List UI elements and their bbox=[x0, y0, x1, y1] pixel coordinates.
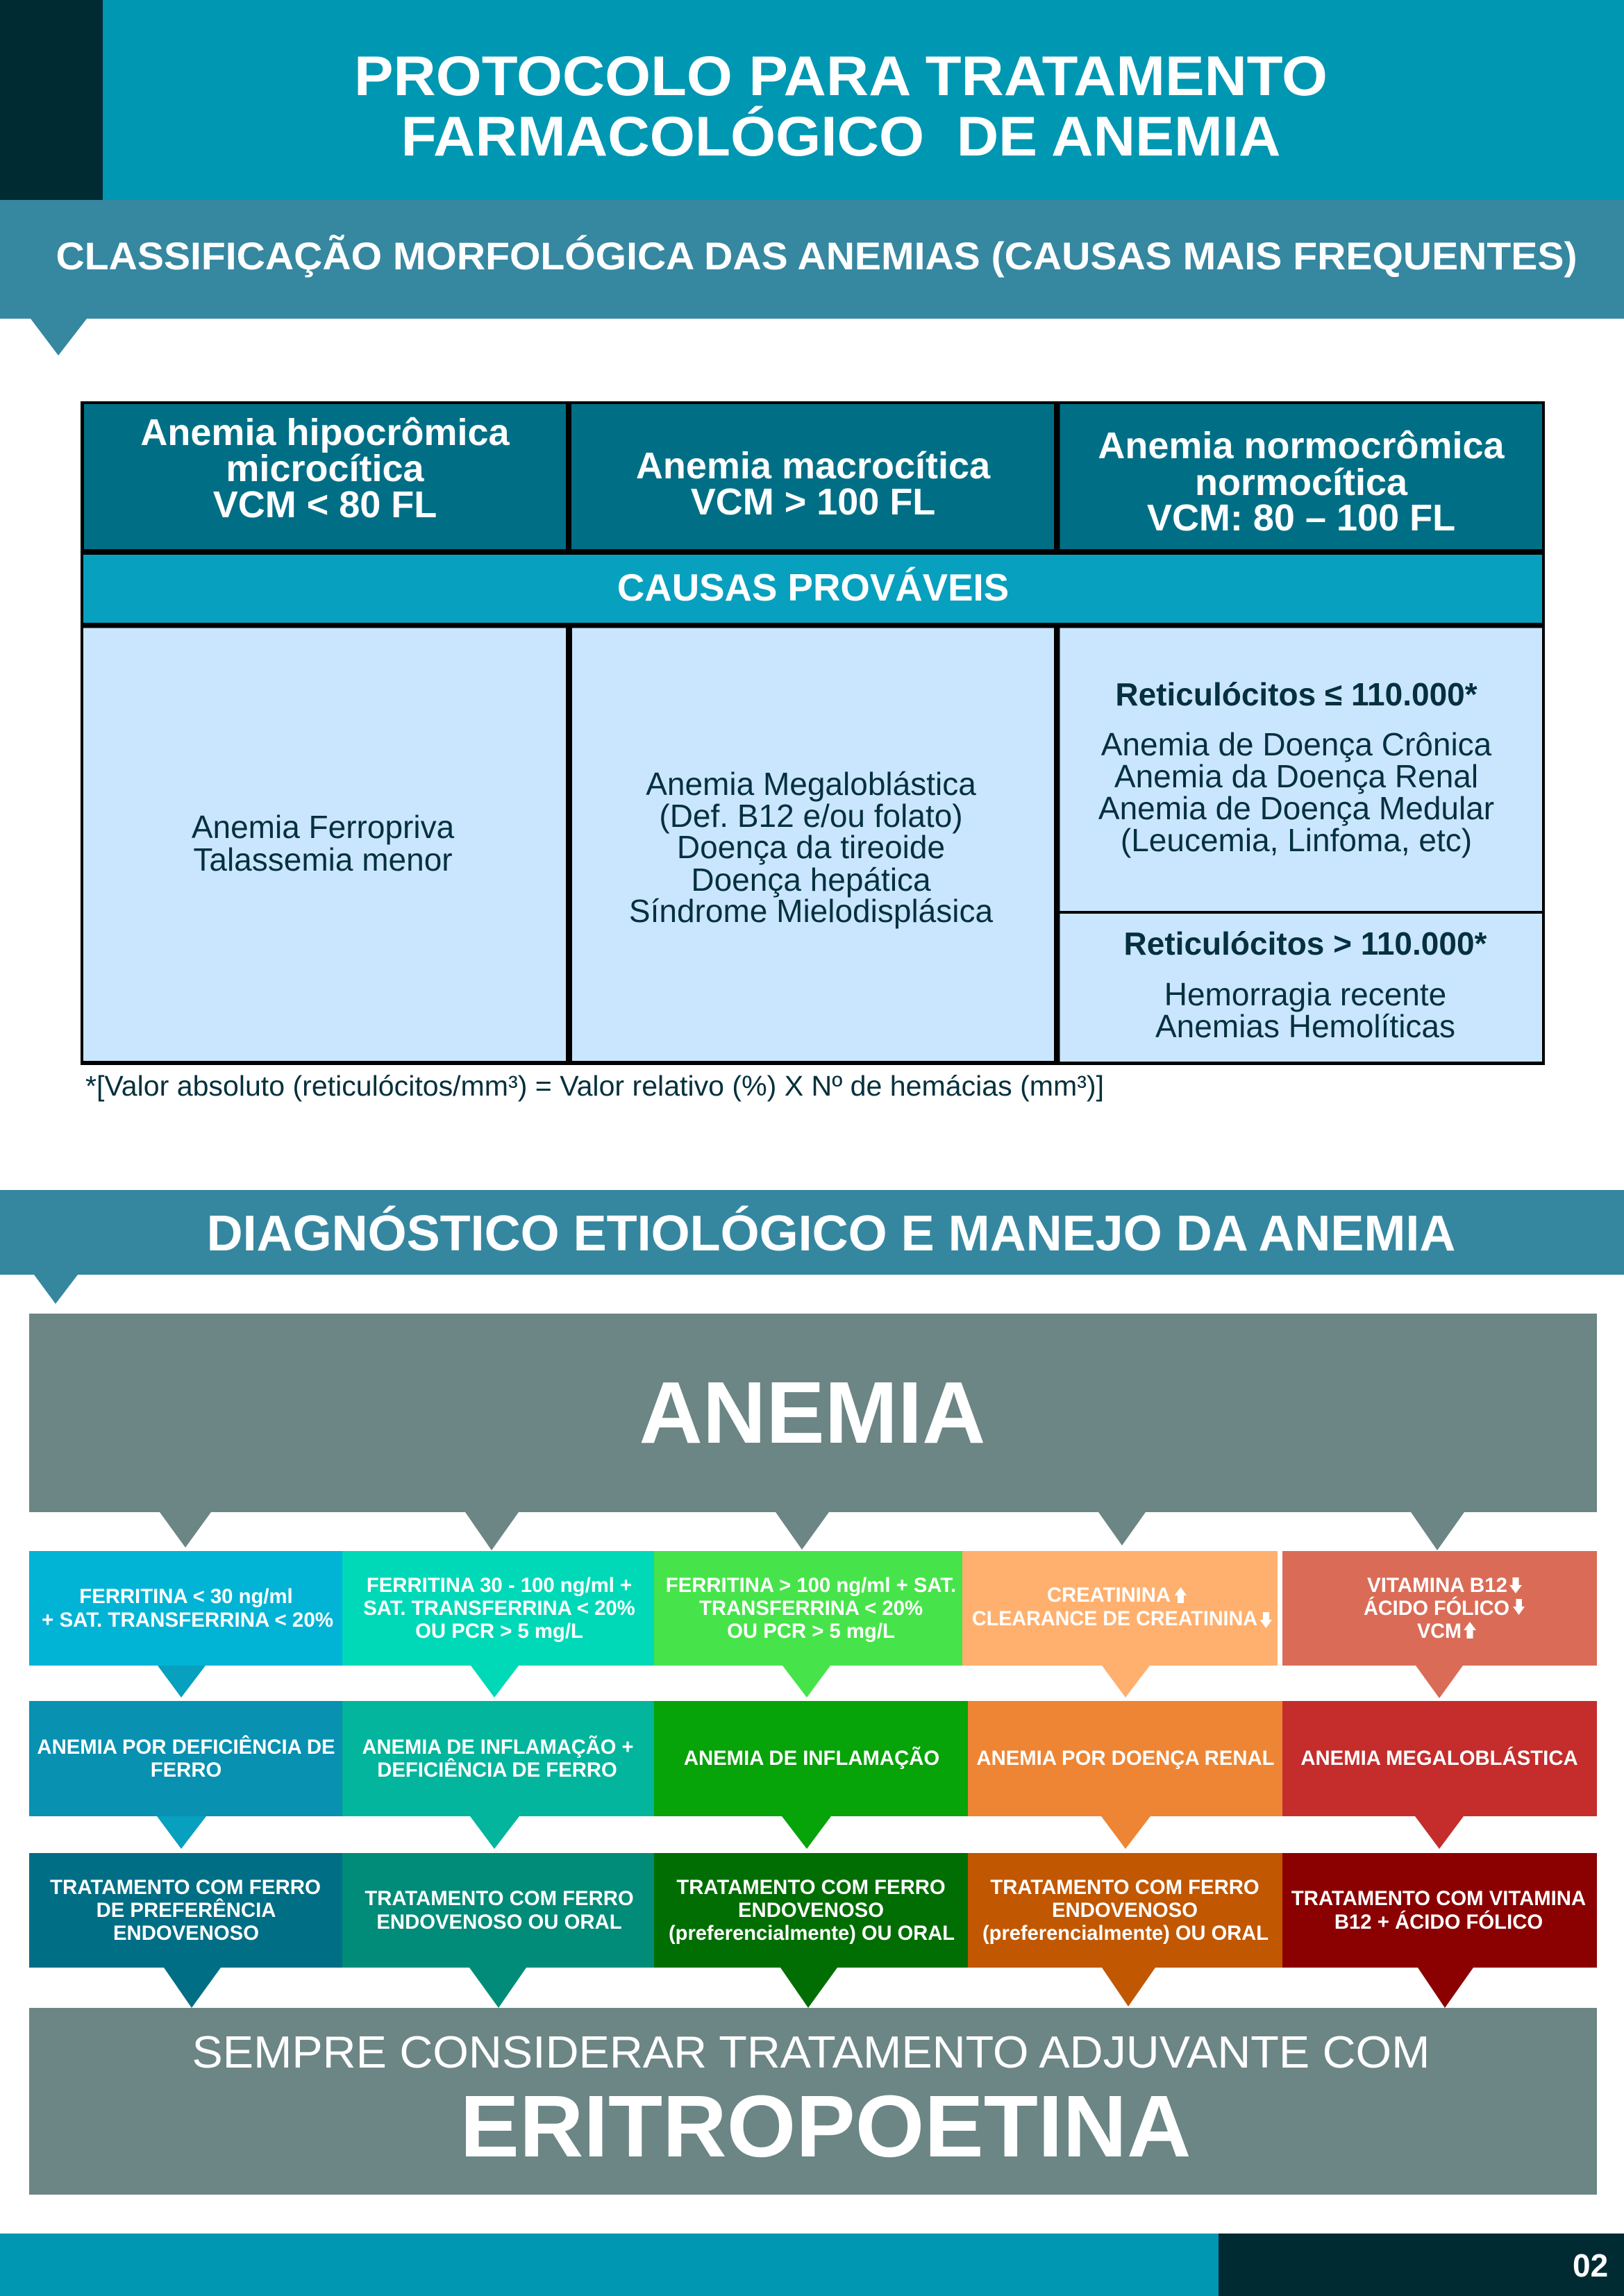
causes: reticulócitos baixos: (Leucemia, Linfoma, etc) bbox=[1121, 822, 1472, 858]
title banner: FARMACOLÓGICO DE ANEMIA bbox=[401, 105, 1280, 168]
title banner bbox=[0, 0, 1624, 200]
lab finding: ferritina intermediária bbox=[342, 1551, 654, 1698]
causes: reticulócitos baixos bbox=[1060, 628, 1542, 911]
lab finding: ferritina intermediária: FERRITINA 30 - 100 ng/ml + bbox=[367, 1574, 632, 1597]
lab finding: vitamina B12: VITAMINA B12 bbox=[1367, 1574, 1507, 1597]
treatment: ferro endovenoso preferencial: TRATAMENTO COM FERRO bbox=[50, 1876, 321, 1899]
lab finding: vitamina B12: ÁCIDO FÓLICO bbox=[1364, 1596, 1509, 1620]
lab finding: ferritina baixa: FERRITINA < 30 ng/ml bbox=[79, 1585, 293, 1608]
treatment: inflamação bbox=[654, 1853, 968, 2008]
treatment: inflamação: ENDOVENOSO bbox=[738, 1899, 884, 1922]
treatment: vitamina B12 bbox=[1282, 1853, 1597, 2008]
diagnosis: inflamação + deficiência bbox=[342, 1701, 654, 1849]
causas prováveis band bbox=[83, 555, 1542, 623]
treatment: ferro endovenoso ou oral bbox=[342, 1853, 654, 2008]
table header: microcítica: VCM < 80 FL bbox=[213, 484, 437, 526]
footer bar bbox=[0, 2234, 1624, 2296]
diagnosis: deficiência de ferro: FERRO bbox=[151, 1759, 221, 1782]
diagnosis: megaloblástica bbox=[1282, 1701, 1597, 1849]
causes: reticulócitos altos: Hemorragia recente bbox=[1164, 976, 1446, 1012]
causes: microcítica: Anemia Ferropriva bbox=[192, 809, 455, 845]
treatment: ferro endovenoso preferencial: ENDOVENOSO bbox=[113, 1922, 259, 1945]
lab finding: ferritina alta: TRANSFERRINA < 20% bbox=[699, 1597, 923, 1620]
treatment: doença renal: TRATAMENTO COM FERRO bbox=[990, 1876, 1259, 1899]
causes: reticulócitos baixos: Reticulócitos ≤ 110.000* bbox=[1115, 676, 1477, 712]
section heading: classificação morfológica: CLASSIFICAÇÃO MORFOLÓGICA DAS ANEMIAS (CAUSAS MAIS FREQUENTES) bbox=[56, 234, 1577, 278]
diagnosis: doença renal bbox=[968, 1701, 1282, 1849]
lab finding: creatinina: CREATININA bbox=[1047, 1584, 1171, 1607]
lab finding: ferritina baixa: + SAT. TRANSFERRINA < 20% bbox=[42, 1609, 333, 1632]
section heading: classificação morfológica bbox=[0, 200, 1624, 355]
title banner: PROTOCOLO PARA TRATAMENTO bbox=[354, 45, 1328, 108]
causes: macrocítica: Doença da tireoide bbox=[677, 829, 945, 865]
causes: macrocítica bbox=[572, 628, 1054, 1061]
lab finding: ferritina intermediária: OU PCR > 5 mg/L bbox=[415, 1620, 583, 1643]
diagnosis: deficiência de ferro bbox=[29, 1701, 342, 1849]
causes: macrocítica: Anemia Megaloblástica bbox=[646, 766, 976, 802]
diagnosis: inflamação: ANEMIA DE INFLAMAÇÃO bbox=[684, 1746, 939, 1770]
causes: microcítica bbox=[83, 628, 566, 1061]
classification table bbox=[81, 401, 1545, 1065]
causas prováveis band: CAUSAS PROVÁVEIS bbox=[617, 566, 1009, 609]
icon: arrow up bbox=[1464, 1622, 1476, 1639]
icon: arrow up bbox=[1175, 1587, 1187, 1603]
treatment: ferro endovenoso ou oral: TRATAMENTO COM FERRO bbox=[365, 1887, 634, 1910]
treatment: ferro endovenoso preferencial bbox=[29, 1853, 342, 2008]
treatment: doença renal bbox=[968, 1853, 1282, 2006]
section heading: diagnóstico etiológico bbox=[0, 1190, 1624, 1304]
lab finding: creatinina bbox=[962, 1551, 1278, 1698]
treatment: inflamação: (preferencialmente) OU ORAL bbox=[669, 1922, 955, 1945]
causes: reticulócitos baixos: Anemia da Doença Renal bbox=[1114, 758, 1478, 794]
table header: normocítica: VCM: 80 – 100 FL bbox=[1147, 497, 1455, 539]
table header: macrocítica: Anemia macrocítica bbox=[636, 445, 991, 487]
table header: normocítica bbox=[1060, 404, 1542, 549]
causes: reticulócitos altos: Anemias Hemolíticas bbox=[1155, 1008, 1455, 1044]
treatment: vitamina B12: B12 + ÁCIDO FÓLICO bbox=[1334, 1910, 1543, 1934]
footnote: *[Valor absoluto (reticulócitos/mm³) = Valor relativo (%) X Nº de hemácias (mm³)] bbox=[85, 1070, 1104, 1102]
lab finding: vitamina B12 bbox=[1282, 1551, 1597, 1698]
icon: arrow down bbox=[1513, 1599, 1525, 1615]
lab finding: ferritina alta: OU PCR > 5 mg/L bbox=[727, 1620, 895, 1643]
causes: macrocítica: (Def. B12 e/ou folato) bbox=[659, 798, 963, 834]
lab finding: ferritina alta bbox=[654, 1551, 962, 1698]
table header: normocítica: normocítica bbox=[1195, 462, 1408, 503]
table header: microcítica: Anemia hipocrômica bbox=[140, 412, 510, 453]
lab finding: vitamina B12: VCM bbox=[1417, 1620, 1462, 1643]
treatment: vitamina B12: TRATAMENTO COM VITAMINA bbox=[1291, 1887, 1586, 1910]
diagnosis: inflamação bbox=[654, 1701, 968, 1849]
icon: arrow down bbox=[1509, 1577, 1522, 1593]
lab finding: ferritina alta: FERRITINA > 100 ng/ml + SAT. bbox=[666, 1574, 956, 1597]
table header: microcítica: microcítica bbox=[226, 448, 425, 489]
treatment: ferro endovenoso ou oral: ENDOVENOSO OU ORAL bbox=[376, 1911, 622, 1934]
diagnosis: doença renal: ANEMIA POR DOENÇA RENAL bbox=[976, 1747, 1275, 1770]
treatment: inflamação: TRATAMENTO COM FERRO bbox=[676, 1876, 946, 1899]
causes: macrocítica: Síndrome Mielodisplásica bbox=[629, 893, 993, 929]
causes: reticulócitos baixos: Anemia de Doença Medular bbox=[1098, 790, 1494, 826]
lab finding: ferritina baixa bbox=[29, 1551, 342, 1698]
eritropoetina box: SEMPRE CONSIDERAR TRATAMENTO ADJUVANTE COM bbox=[192, 2027, 1430, 2077]
diagnosis: megaloblástica: ANEMIA MEGALOBLÁSTICA bbox=[1300, 1746, 1578, 1770]
diagnosis: deficiência de ferro: ANEMIA POR DEFICIÊNCIA DE bbox=[37, 1735, 335, 1759]
icon: arrow down bbox=[1259, 1612, 1272, 1628]
lab finding: creatinina: CLEARANCE DE CREATININA bbox=[972, 1607, 1257, 1630]
causes: reticulócitos altos bbox=[1060, 914, 1542, 1062]
footer bar: 02 bbox=[1573, 2247, 1608, 2284]
anemia box bbox=[29, 1314, 1597, 1550]
lab finding: ferritina intermediária: SAT. TRANSFERRINA < 20% bbox=[363, 1597, 635, 1620]
table header: macrocítica bbox=[571, 404, 1054, 549]
eritropoetina box bbox=[29, 2008, 1597, 2195]
anemia box: ANEMIA bbox=[639, 1363, 985, 1461]
diagnosis: inflamação + deficiência: DEFICIÊNCIA DE FERRO bbox=[377, 1758, 617, 1782]
treatment: ferro endovenoso preferencial: DE PREFERÊNCIA bbox=[97, 1898, 276, 1922]
treatment: doença renal: (preferencialmente) OU ORAL bbox=[982, 1922, 1269, 1945]
treatment: doença renal: ENDOVENOSO bbox=[1052, 1899, 1198, 1922]
table header: microcítica bbox=[84, 404, 566, 549]
causes: macrocítica: Doença hepática bbox=[691, 862, 931, 898]
table header: normocítica: Anemia normocrômica bbox=[1098, 425, 1505, 467]
causes: reticulócitos baixos: Anemia de Doença Crônica bbox=[1101, 726, 1492, 762]
section heading: diagnóstico etiológico: DIAGNÓSTICO ETIOLÓGICO E MANEJO DA ANEMIA bbox=[207, 1205, 1455, 1262]
table header: macrocítica: VCM > 100 FL bbox=[691, 481, 935, 523]
eritropoetina box: ERITROPOETINA bbox=[460, 2077, 1191, 2175]
causes: microcítica: Talassemia menor bbox=[193, 841, 453, 878]
diagnosis: inflamação + deficiência: ANEMIA DE INFLAMAÇÃO + bbox=[362, 1735, 633, 1759]
causes: reticulócitos altos: Reticulócitos > 110.000* bbox=[1124, 925, 1487, 962]
